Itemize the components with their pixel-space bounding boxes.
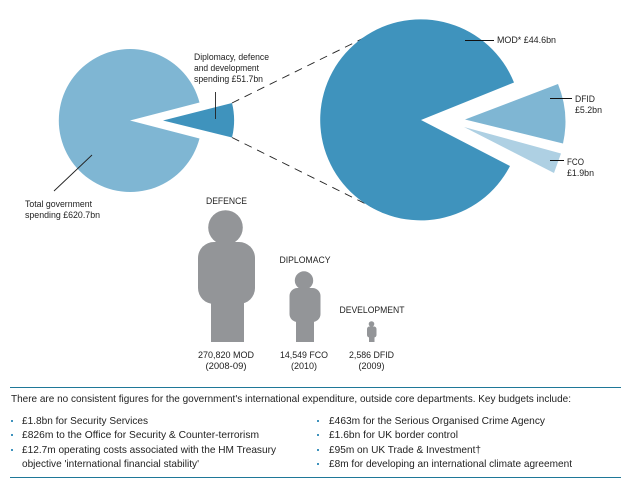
text: defence staff: (2008-09) xyxy=(206,361,246,371)
icon: diplomacy person xyxy=(290,271,320,342)
panel: key budgets xyxy=(10,388,621,478)
pie slice: diplomacy, defence and development xyxy=(163,103,234,138)
label: FCO xyxy=(550,157,594,178)
text: development staff: (2009) xyxy=(358,361,384,371)
list: left column budgets xyxy=(11,416,277,470)
label: MOD xyxy=(465,35,556,45)
text: development staff: 2,586 DFID xyxy=(349,350,394,360)
label: total government spending: spending £620.7bn xyxy=(25,210,100,220)
label: FCO: £1.9bn xyxy=(567,168,594,178)
text: defence staff: 270,820 MOD xyxy=(198,350,254,360)
icon: development person xyxy=(367,321,376,342)
dashed connector lines between pies xyxy=(232,30,380,209)
list: right column budgets xyxy=(317,416,572,470)
list: left column budgets: £1.8bn for Security Services xyxy=(22,416,148,427)
text: development staff xyxy=(349,350,394,371)
pie chart: total government spending xyxy=(59,49,234,192)
label: MOD: MOD* £44.6bn xyxy=(497,35,556,45)
label: DFID: £5.2bn xyxy=(575,105,602,115)
list: right column budgets: £95m on UK Trade & Investment† xyxy=(329,445,481,456)
icon: defence person xyxy=(198,210,255,342)
label: FCO: FCO xyxy=(567,157,584,167)
text: introduction: There are no consistent figures for the government's international expenditure, outside core departments. Key budgets include: xyxy=(11,394,571,405)
label: diplomacy, defence and development spending xyxy=(194,52,269,119)
text: diplomacy staff: 14,549 FCO xyxy=(280,350,328,360)
heading: defence: DEFENCE xyxy=(206,196,247,206)
list: left column budgets: objective 'international financial stability' xyxy=(22,459,199,470)
text: diplomacy staff xyxy=(280,350,328,371)
label: DFID xyxy=(550,94,602,115)
pie slice: MOD xyxy=(320,19,514,220)
pie slice: DFID xyxy=(465,84,565,144)
list: right column budgets: £8m for developing an international climate agreement xyxy=(329,459,572,470)
label: diplomacy, defence and development spending: spending £51.7bn xyxy=(194,74,263,84)
label: total government spending xyxy=(25,155,100,220)
label: diplomacy, defence and development spending: and development xyxy=(194,63,259,73)
text: defence staff xyxy=(198,350,254,371)
label: DFID: DFID xyxy=(575,94,595,104)
heading: development: DEVELOPMENT xyxy=(340,305,405,315)
text: diplomacy staff: (2010) xyxy=(291,361,317,371)
heading: diplomacy: DIPLOMACY xyxy=(280,255,330,265)
label: total government spending: Total government xyxy=(25,199,92,209)
list: left column budgets: £12.7m operating costs associated with the HM Treasury xyxy=(22,445,277,456)
list: right column budgets: £463m for the Serious Organised Crime Agency xyxy=(329,416,546,427)
pie slice: rest of government spending xyxy=(59,49,200,192)
list: right column budgets: £1.6bn for UK border control xyxy=(329,430,458,441)
list: left column budgets: £826m to the Office for Security & Counter-terrorism xyxy=(22,430,259,441)
pie chart: department breakdown xyxy=(320,19,565,220)
pie slice: FCO xyxy=(464,127,561,173)
label: diplomacy, defence and development spending: Diplomacy, defence xyxy=(194,52,269,62)
